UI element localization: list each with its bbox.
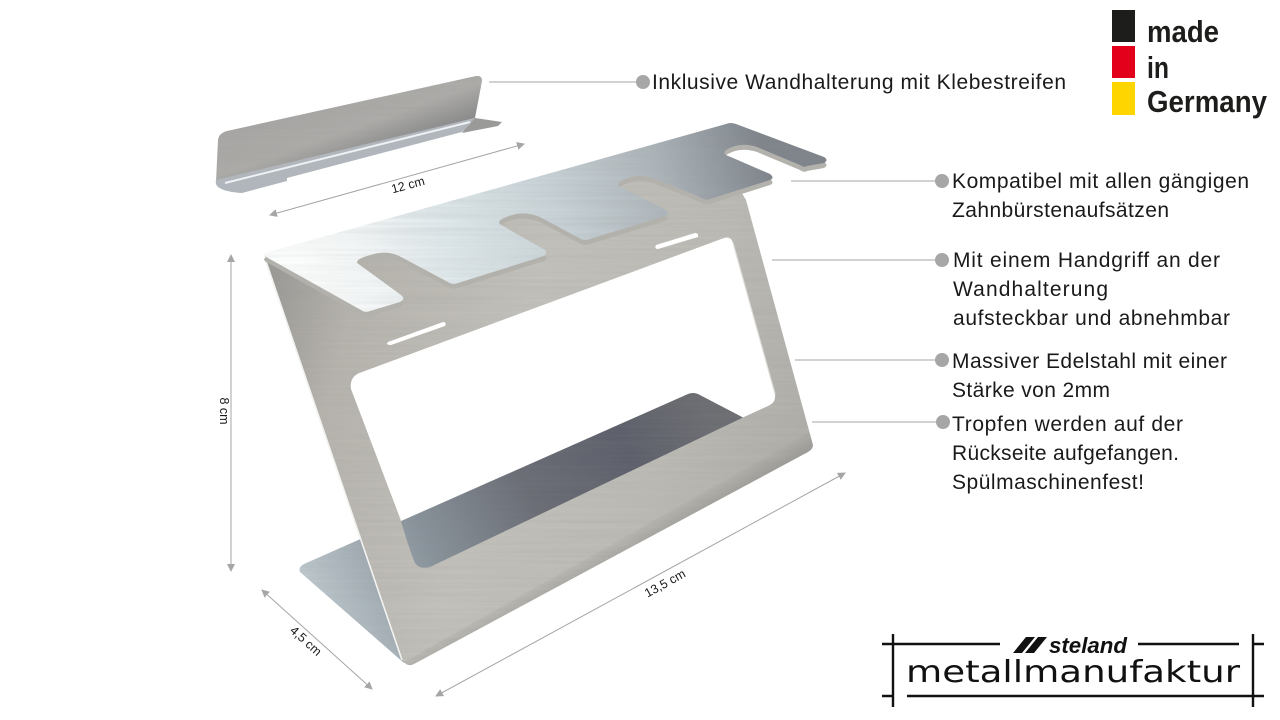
callout: material: Stärke von 2mm — [952, 379, 1110, 402]
arrow: 13,5 cm dimension: 13,5 cm — [642, 567, 688, 600]
callout: compatibility: Kompatibel mit allen gängigen — [952, 170, 1249, 193]
callout: drops and dishwasher: Rückseite aufgefangen. — [952, 442, 1179, 465]
made in Germany badge — [1112, 10, 1268, 119]
callout: wall bracket: Inklusive Wandhalterung mit Klebestreifen — [652, 71, 1066, 94]
callout: drops and dishwasher: Tropfen werden auf der — [952, 413, 1183, 436]
callout: attachment — [772, 249, 1230, 330]
arrow: 4,5 cm dimension: 4,5 cm — [287, 623, 324, 659]
base plate — [300, 393, 744, 663]
made in Germany badge: Germany — [1147, 84, 1268, 119]
arrow: 12 cm dimension — [270, 144, 524, 215]
callout: attachment: Mit einem Handgriff an der — [953, 249, 1220, 272]
callout: drops and dishwasher — [812, 413, 1183, 494]
made in Germany badge: in — [1147, 50, 1169, 85]
callout: attachment: Wandhalterung — [953, 278, 1108, 301]
callout: attachment: aufsteckbar und abnehmbar — [953, 307, 1230, 330]
top plate with toothbrush slots — [264, 123, 826, 317]
front plate with window and slots — [265, 172, 813, 665]
arrow: 4,5 cm dimension — [262, 590, 372, 689]
callout: drops and dishwasher: Spülmaschinenfest! — [952, 471, 1144, 494]
callout: material — [795, 350, 1227, 402]
wall bracket — [216, 76, 502, 193]
made in Germany badge: made — [1147, 14, 1219, 49]
arrow: 12 cm dimension: 12 cm — [390, 174, 426, 196]
arrow: 8 cm dimension: 8 cm — [217, 397, 231, 425]
callout: compatibility — [791, 170, 1249, 222]
callout: compatibility: Zahnbürstenaufsätzen — [952, 199, 1169, 222]
arrow: 13,5 cm dimension — [436, 473, 845, 696]
callout: material: Massiver Edelstahl mit einer — [952, 350, 1227, 373]
steland metallmanufaktur logo: steland — [1049, 633, 1128, 658]
steland metallmanufaktur logo — [882, 633, 1264, 707]
steland metallmanufaktur logo: metallmanufaktur — [906, 655, 1241, 690]
